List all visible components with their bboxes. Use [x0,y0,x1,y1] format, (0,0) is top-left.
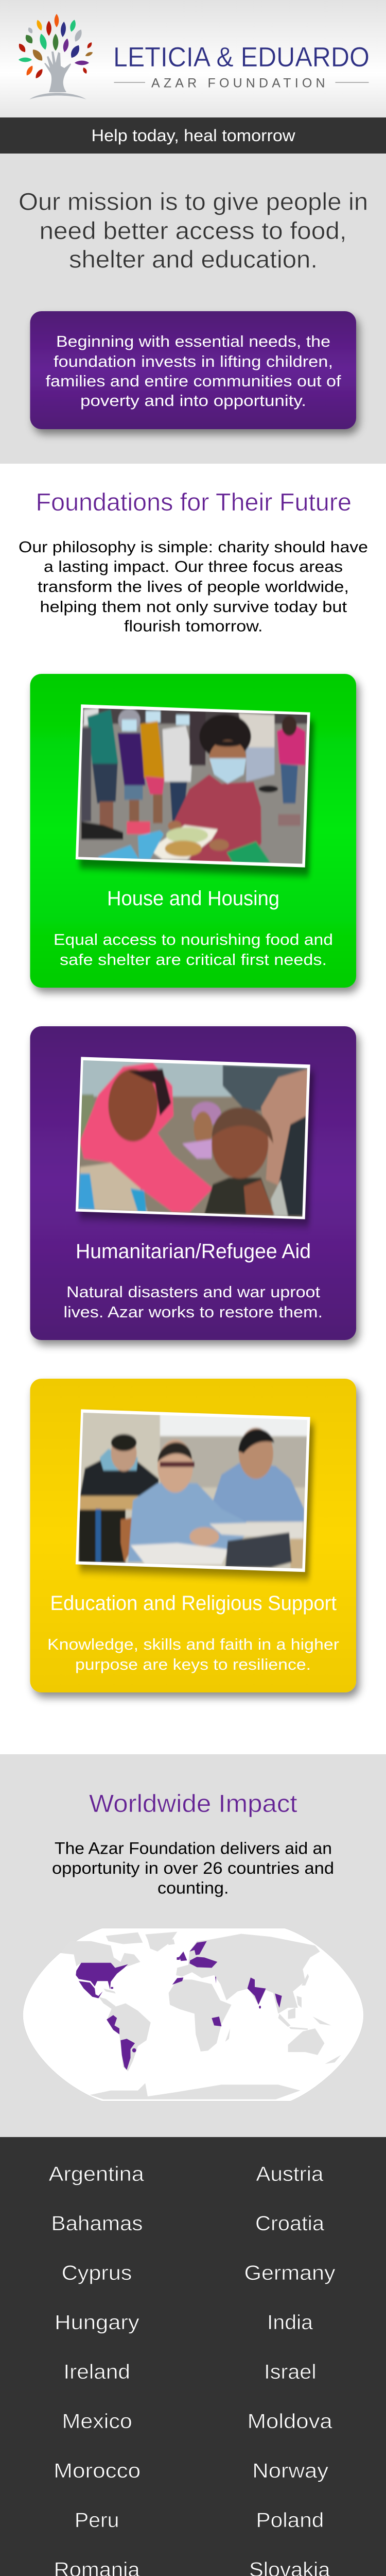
mission statement: shelter and education. [69,245,318,273]
country names: Israel [264,2361,317,2383]
card title: Education and Religious Support [50,1592,337,1615]
country names: Argentina [49,2163,145,2185]
card text: purpose are keys to resilience. [75,1655,311,1673]
country names: Morocco [54,2460,141,2482]
photo: students in classroom [74,1409,314,1579]
philosophy text: transform the lives of people worldwide, [38,578,349,596]
country names: Austria [256,2163,324,2185]
card title: Humanitarian/Refugee Aid [76,1240,311,1263]
philosophy text: Our philosophy is simple: charity should have [19,538,368,556]
callout: essential needs: poverty and into opportunity. [80,392,306,410]
country names: Moldova [248,2410,333,2433]
callout: essential needs [30,311,356,429]
country names: Bahamas [51,2212,143,2235]
card text [47,1635,339,1673]
logo wordmark: LETICIA & EDUARDO [113,42,370,73]
heading: worldwide impact: Worldwide Impact [89,1790,297,1818]
country names: Cyprus [62,2262,132,2284]
heading: foundations: Foundations for Their Future [36,489,352,516]
world map [23,1928,363,2101]
panel: mission [0,154,386,464]
card text: Natural disasters and war uproot [66,1283,320,1301]
card text: lives. Azar works to restore them. [64,1303,323,1321]
country names: Germany [244,2262,336,2284]
panel: worldwide impact [0,1754,386,2137]
mission statement: Our mission is to give people in [19,188,368,215]
mission statement: need better access to food, [39,217,347,244]
panel: foundations [20,493,367,1703]
card: education [30,1379,356,1692]
country names: Poland [256,2509,324,2532]
photo: child with food tray [74,702,314,876]
impact text: opportunity in over 26 countries and [52,1859,334,1877]
card title: House and Housing [107,887,279,910]
country names: Hungary [55,2311,139,2334]
philosophy text: a lasting impact. Our three focus areas [44,557,343,575]
philosophy text: flourish tomorrow. [124,617,262,635]
header with logo [0,0,386,117]
logo subtitle: AZAR FOUNDATION [151,76,325,91]
country names: Ireland [63,2361,130,2383]
country names: Mexico [62,2410,132,2433]
impact text: The Azar Foundation delivers aid an [55,1839,332,1858]
land masses [60,1931,341,2099]
callout: essential needs: foundation invests in lifting children, [54,352,333,370]
icon: tree and hand logo [17,14,94,99]
tagline bar: Help today, heal tomorrow [92,126,295,145]
country names: Peru [75,2509,119,2532]
card text: safe shelter are critical first needs. [60,951,327,969]
card: humanitarian aid [30,1026,356,1340]
country names: India [267,2311,313,2334]
card text: Equal access to nourishing food and [54,930,333,948]
callout: essential needs: families and entire communities out of [45,372,341,390]
impact text [52,1839,334,1897]
highlighted countries [76,1941,282,2070]
impact text: counting. [157,1878,229,1897]
country names [49,2163,371,2576]
panel: countries list [0,2137,386,2576]
photo: mother and child [74,1056,314,1226]
country names: Norway [252,2460,328,2482]
philosophy text: helping them not only survive today but [40,598,347,616]
card text [54,930,333,969]
callout: essential needs: Beginning with essential needs, the [56,332,330,350]
country names: Croatia [255,2212,325,2235]
philosophy text [19,538,368,635]
card text [64,1283,323,1321]
card text: Knowledge, skills and faith in a higher [47,1635,339,1653]
card: house and housing [30,674,356,988]
mission statement [19,188,368,273]
tagline bar [0,117,386,154]
